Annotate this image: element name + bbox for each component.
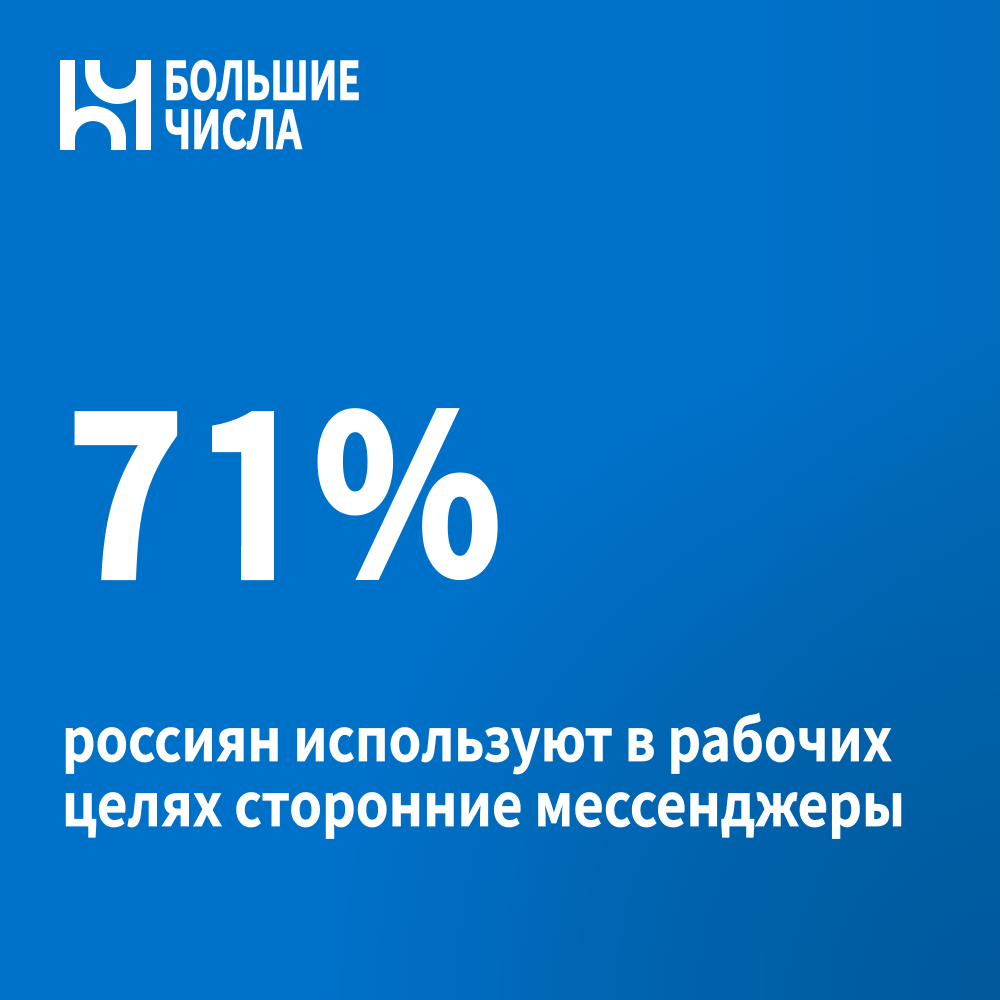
description line 1: россиян используют в рабочих [62,694,892,778]
main figure: 1 [192,315,319,642]
icon: logo mark [68,60,144,150]
logo [68,40,360,164]
main figure [74,408,498,580]
main figure: % [314,325,501,637]
description text [62,694,905,843]
logo wordmark: second line: ЧИСЛА [164,88,302,164]
main figure: 7 [67,316,184,643]
description line 2: целях сторонние мессенджеры [62,759,905,843]
logo wordmark: first line: БОЛЬШИЕ [164,40,360,114]
